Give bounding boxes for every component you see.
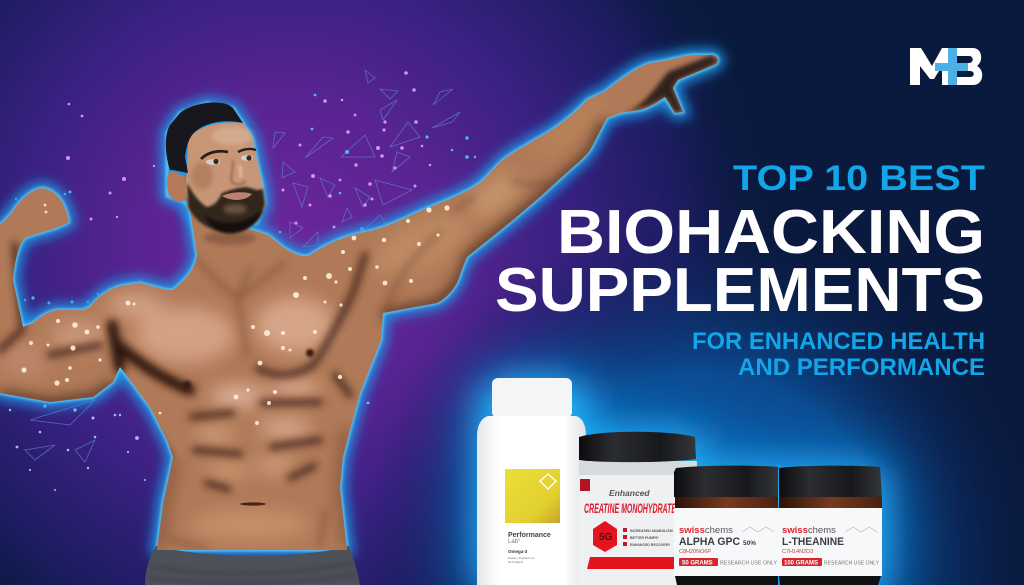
product: creatine tub: 5G [599, 532, 613, 543]
hand in shadow [625, 55, 719, 113]
muscle shading [0, 55, 719, 548]
man: torso and arms [0, 55, 719, 550]
subheading line two: AND PERFORMANCE [738, 354, 985, 381]
heading: biohacking: BIOHACKING [557, 197, 985, 267]
product: alpha gpc jar: swisschems [679, 525, 733, 536]
product: creatine tub: CREATINE MONOHYDRATE [584, 501, 677, 516]
man: head [166, 102, 265, 245]
product: alpha gpc jar: C8H20NO6P [679, 549, 711, 555]
heading: top 10 best: TOP 10 BEST [733, 159, 985, 198]
product: l-theanine jar: L-THEANINE [782, 536, 844, 548]
eyes and brows [201, 149, 256, 185]
neck shadow [204, 231, 256, 245]
ear [167, 171, 186, 202]
product: alpha gpc jar [674, 466, 778, 585]
logo: M+B [910, 48, 982, 85]
product: l-theanine jar: swisschems [782, 525, 836, 536]
product: l-theanine jar: C7H14N2O3 [782, 549, 814, 555]
subheading line one: FOR ENHANCED HEALTH [692, 328, 985, 355]
beard [187, 183, 265, 233]
product: alpha gpc jar: 50 GRAMS [682, 560, 713, 566]
product: performance lab bottle: Performance [508, 532, 551, 539]
man: shorts [145, 546, 360, 585]
heading: supplements: SUPPLEMENTS [495, 255, 985, 325]
lips [222, 192, 252, 200]
product: performance lab bottle [477, 378, 586, 585]
yellow label [505, 469, 560, 523]
product: performance lab bottle: Lab° [508, 539, 521, 545]
product: creatine tub [579, 432, 697, 585]
hair [166, 102, 243, 173]
product: alpha gpc jar: ALPHA GPC [679, 536, 740, 548]
product: creatine tub: BETTER PUMPS* [630, 536, 659, 540]
product: alpha gpc jar: 50% [743, 540, 756, 547]
product: performance lab bottle: 60 Softgels [508, 560, 524, 564]
product: l-theanine jar: RESEARCH USE ONLY [824, 560, 879, 566]
product: l-theanine jar [778, 466, 882, 585]
product: creatine tub: ENHANCED RECOVERY [630, 543, 671, 547]
product: creatine tub: Enhanced [609, 488, 650, 498]
product: performance lab bottle: Omega-3 [508, 549, 528, 554]
product: creatine tub: INCREASED ANABOLISM [630, 529, 673, 533]
particles and triangles network [9, 70, 476, 491]
product: performance lab bottle: Dietary Supplement [508, 556, 535, 560]
products: blue glow behind [478, 378, 884, 585]
sparkles over body [21, 204, 450, 425]
man: rim glow [0, 55, 718, 550]
product: l-theanine jar: 100 GRAMS [784, 560, 818, 566]
product: alpha gpc jar: RESEARCH USE ONLY [720, 560, 777, 566]
face [185, 122, 265, 233]
